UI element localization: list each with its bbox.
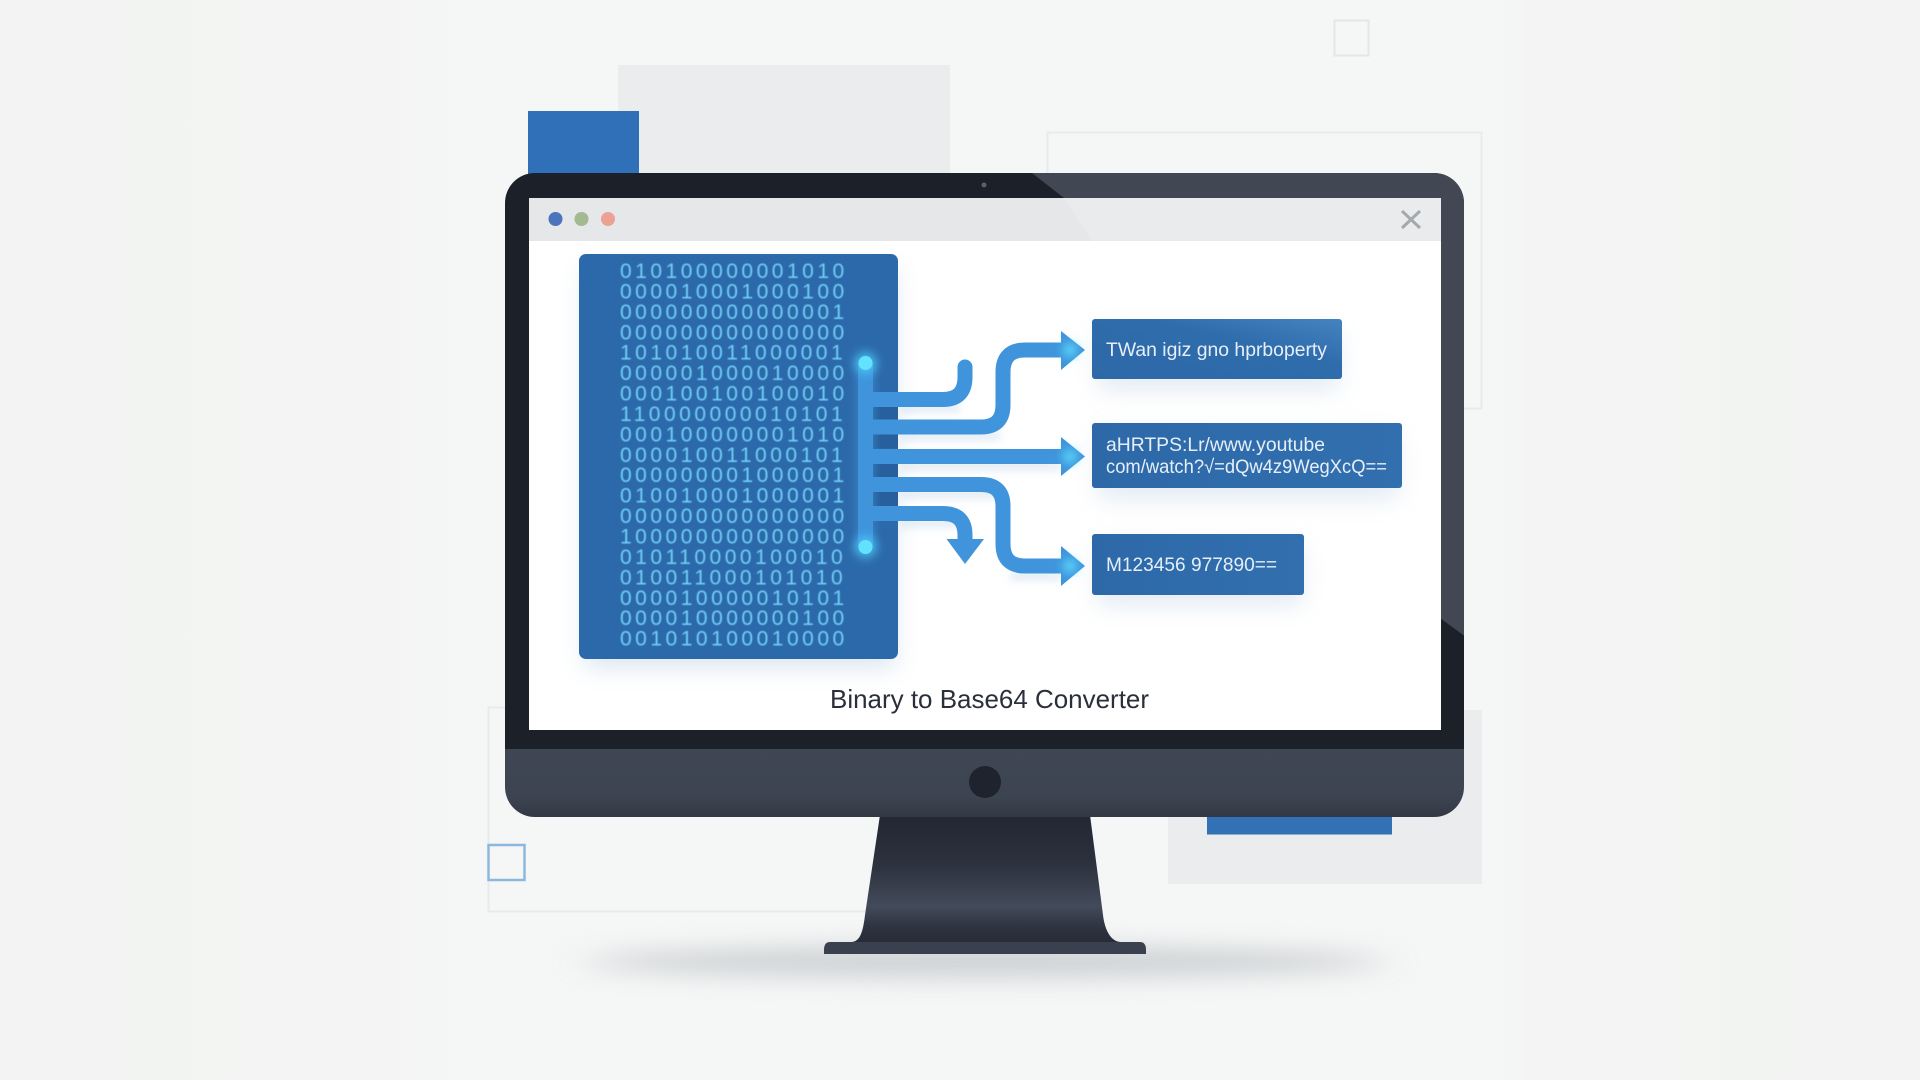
arrow node 1 xyxy=(1063,343,1077,357)
camera dot xyxy=(982,182,986,188)
binary digits: 010010001000001 xyxy=(620,485,848,508)
output box 3 xyxy=(1092,534,1304,595)
branch 2 to first output xyxy=(866,350,1066,427)
arrow node 3 xyxy=(1063,559,1077,573)
binary digits: 000001000010000 xyxy=(620,362,848,385)
window dot red xyxy=(601,212,615,226)
chin button xyxy=(969,766,1001,798)
small blue outlined square xyxy=(488,845,524,880)
branch 5 short down xyxy=(866,514,965,545)
bezel glare xyxy=(1032,173,1470,640)
blue rectangle top left xyxy=(528,111,639,186)
binary digits: 000010000000100 xyxy=(620,607,848,630)
binary digits: 000000000000001 xyxy=(620,301,848,324)
node top xyxy=(858,356,872,370)
title bar glare xyxy=(1064,198,1441,241)
output box shadows xyxy=(1098,330,1398,605)
decorative backdrop shapes xyxy=(488,20,1482,912)
window dot blue xyxy=(548,212,562,226)
title bar xyxy=(529,198,1441,241)
outlined rectangle top right xyxy=(1048,132,1482,408)
glow behind vertical bar xyxy=(856,360,875,550)
binary digits: 010011000101010 xyxy=(620,566,846,589)
panel shadow xyxy=(585,268,895,668)
monitor bezel xyxy=(505,173,1464,749)
arrowheads xyxy=(946,331,1085,586)
arrowhead 3 xyxy=(1061,546,1085,586)
branch gaps in panel xyxy=(873,414,898,499)
connectors xyxy=(856,350,1066,566)
node bottom glow xyxy=(854,536,876,558)
vertical bus xyxy=(858,363,873,547)
small outlined square top right xyxy=(1334,20,1368,56)
caption: Binary to Base64 Converter xyxy=(830,684,1149,714)
binary digits xyxy=(620,260,848,651)
connector shadow xyxy=(900,408,1060,576)
grey rectangle bottom right xyxy=(1168,710,1482,884)
stand base xyxy=(824,942,1146,954)
chin xyxy=(505,749,1464,817)
binary digits: 000010001000100 xyxy=(620,280,848,303)
branch 4 to third output xyxy=(866,484,1066,566)
output box 1: TWan igiz gno hprboperty xyxy=(1106,339,1327,361)
binary digits: 010110000100010 xyxy=(620,546,846,569)
binary digits: 110000000010101 xyxy=(620,403,846,426)
binary digits: 100000000000000 xyxy=(620,526,848,548)
output box 2: com/watch?√=dQw4z9WegXcQ== xyxy=(1106,456,1387,478)
screen xyxy=(529,198,1441,730)
node bottom xyxy=(858,540,872,554)
output box 2 xyxy=(1092,423,1402,488)
binary digits: 000010000010101 xyxy=(620,587,848,610)
binary digits: 101010011000001 xyxy=(620,342,846,365)
branch 3 to second output xyxy=(866,449,1066,464)
light grey rectangle top xyxy=(618,65,950,185)
arrowhead 1 xyxy=(1061,331,1085,370)
blue bar bottom right xyxy=(1207,790,1392,834)
arrowhead 4 xyxy=(946,539,984,564)
binary digits: 010100000001010 xyxy=(620,260,848,283)
binary digits: 000100000001010 xyxy=(620,423,848,446)
binary digits: 000010011000101 xyxy=(620,444,846,467)
outlined rectangle bottom left xyxy=(488,708,988,912)
branch 1 short up xyxy=(866,367,965,400)
binary panel xyxy=(579,254,898,659)
window dot green xyxy=(574,212,588,226)
output box 1 xyxy=(1092,319,1342,379)
arrowhead 2 xyxy=(1061,437,1085,476)
ground shadow xyxy=(585,946,1385,978)
binary digits: 001010100010000 xyxy=(620,628,848,651)
binary digits: 000000000000000 xyxy=(620,505,848,528)
close icon xyxy=(1402,211,1420,228)
arrow node 2 xyxy=(1063,450,1077,464)
output box 3: M123456 977890== xyxy=(1106,554,1277,576)
binary digits: 000000000000000 xyxy=(620,321,848,344)
binary digits: 000100100100010 xyxy=(620,382,848,406)
node top glow xyxy=(854,352,876,374)
monitor xyxy=(505,173,1470,954)
output box 2: aHRTPS:Lr/www.youtube xyxy=(1106,434,1325,456)
glowing nodes xyxy=(854,343,1077,573)
stand xyxy=(851,815,1121,942)
binary digits: 000000001000001 xyxy=(620,464,848,487)
